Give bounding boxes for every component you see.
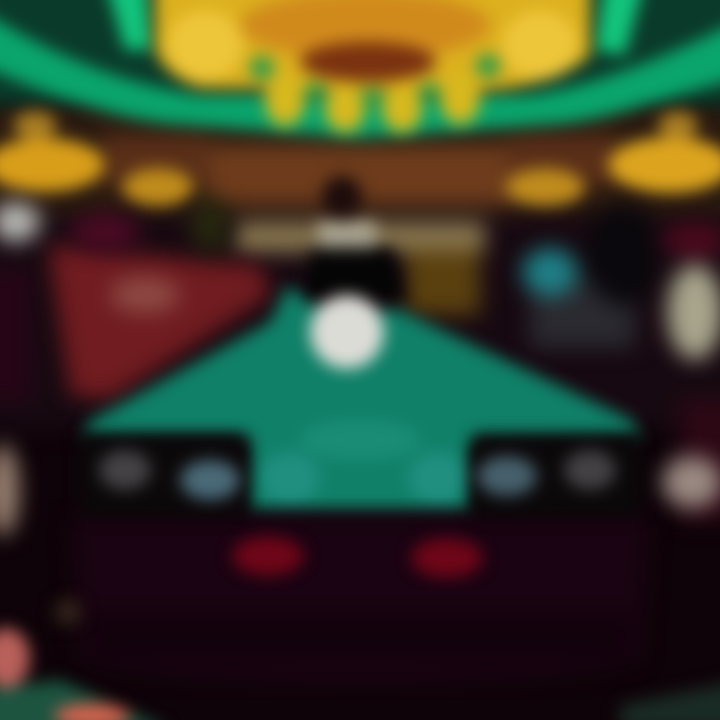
- lights: left and right gold lamps: [0, 111, 720, 206]
- chandelier: central gold fixture: [155, 0, 590, 132]
- left side figures: [0, 197, 230, 536]
- dealer: dark standing figure: [305, 176, 405, 300]
- seat panels: left dark panel with markers: [80, 434, 245, 516]
- table rail: dark front: [70, 515, 650, 682]
- table: green felt: [85, 285, 640, 512]
- ceiling: green canopy: [0, 0, 720, 138]
- right side screens and figures: [522, 205, 720, 508]
- panel: red side board: [48, 245, 272, 400]
- markers: red spots on the rail: [232, 536, 483, 578]
- seat panels: right dark panel with markers: [473, 434, 640, 516]
- floor: bottom corner accents: [0, 598, 720, 720]
- ball: white centre circle: [310, 295, 384, 369]
- background: back wall and room: [0, 100, 720, 520]
